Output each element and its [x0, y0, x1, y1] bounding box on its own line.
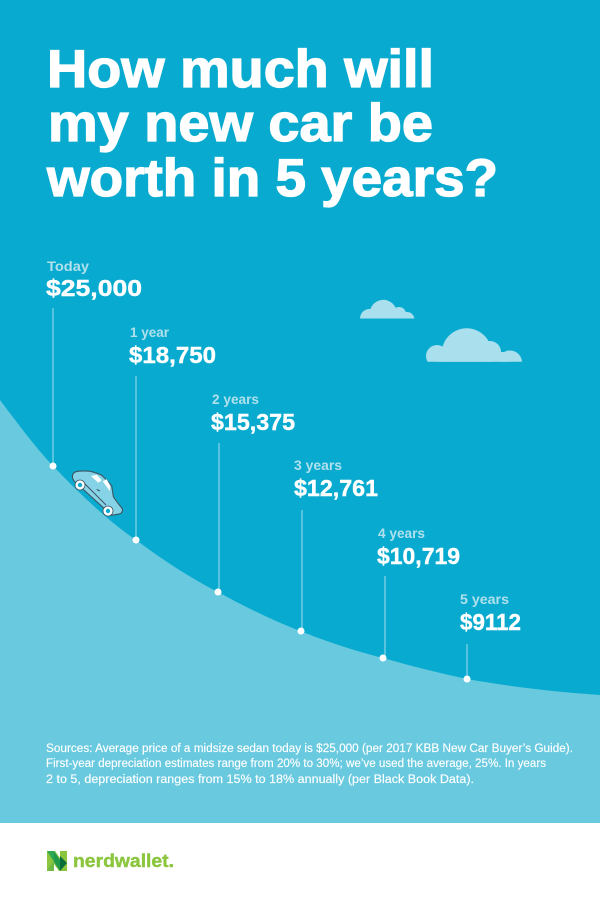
sources note: Sources: Average price of a midsize sedan today is $25,000 (per 2017 KBB New Car Buyer’s Guide). — [46, 743, 573, 755]
sources note — [46, 743, 573, 786]
title: my new car be — [48, 94, 433, 153]
data point: 1 year: 1 year — [130, 324, 170, 340]
icon: car — [72, 471, 122, 516]
data point: today — [46, 258, 142, 470]
data point: 3 years: $12,761 — [294, 475, 378, 501]
cloud: large — [426, 328, 522, 362]
data point: 5 years: 5 years — [460, 591, 509, 607]
data point: 3 years — [294, 457, 378, 634]
data point: 5 years — [460, 591, 521, 682]
data point: 4 years — [377, 525, 460, 662]
logo: nerdwallet — [47, 851, 174, 871]
data point: 1 year — [129, 324, 216, 544]
cloud: small — [360, 300, 414, 318]
data point: 1 year: $18,750 — [129, 342, 216, 368]
data point: 5 years: $9112 — [460, 609, 521, 635]
sources note: First-year depreciation estimates range from 20% to 30%; we’ve used the average, 25%. In years — [46, 758, 546, 770]
data point: 4 years: $10,719 — [377, 543, 460, 569]
data point: today: $25,000 — [46, 275, 142, 301]
data point: 4 years: 4 years — [378, 525, 425, 541]
title — [46, 40, 498, 208]
title: worth in 5 years? — [46, 149, 498, 208]
sources note: 2 to 5, depreciation ranges from 15% to 18% annually (per Black Book Data). — [46, 774, 474, 786]
data point: 2 years: 2 years — [212, 391, 259, 407]
icon: logo mark — [47, 851, 67, 871]
data point: 2 years — [211, 391, 295, 596]
footer band — [0, 823, 600, 901]
wordmark: nerdwallet. — [73, 851, 174, 871]
title: How much will — [47, 40, 434, 99]
data point: 3 years: 3 years — [294, 457, 342, 473]
data point: 2 years: $15,375 — [211, 409, 295, 435]
depreciation curve hill — [0, 400, 600, 823]
data point: today: Today — [47, 258, 89, 274]
